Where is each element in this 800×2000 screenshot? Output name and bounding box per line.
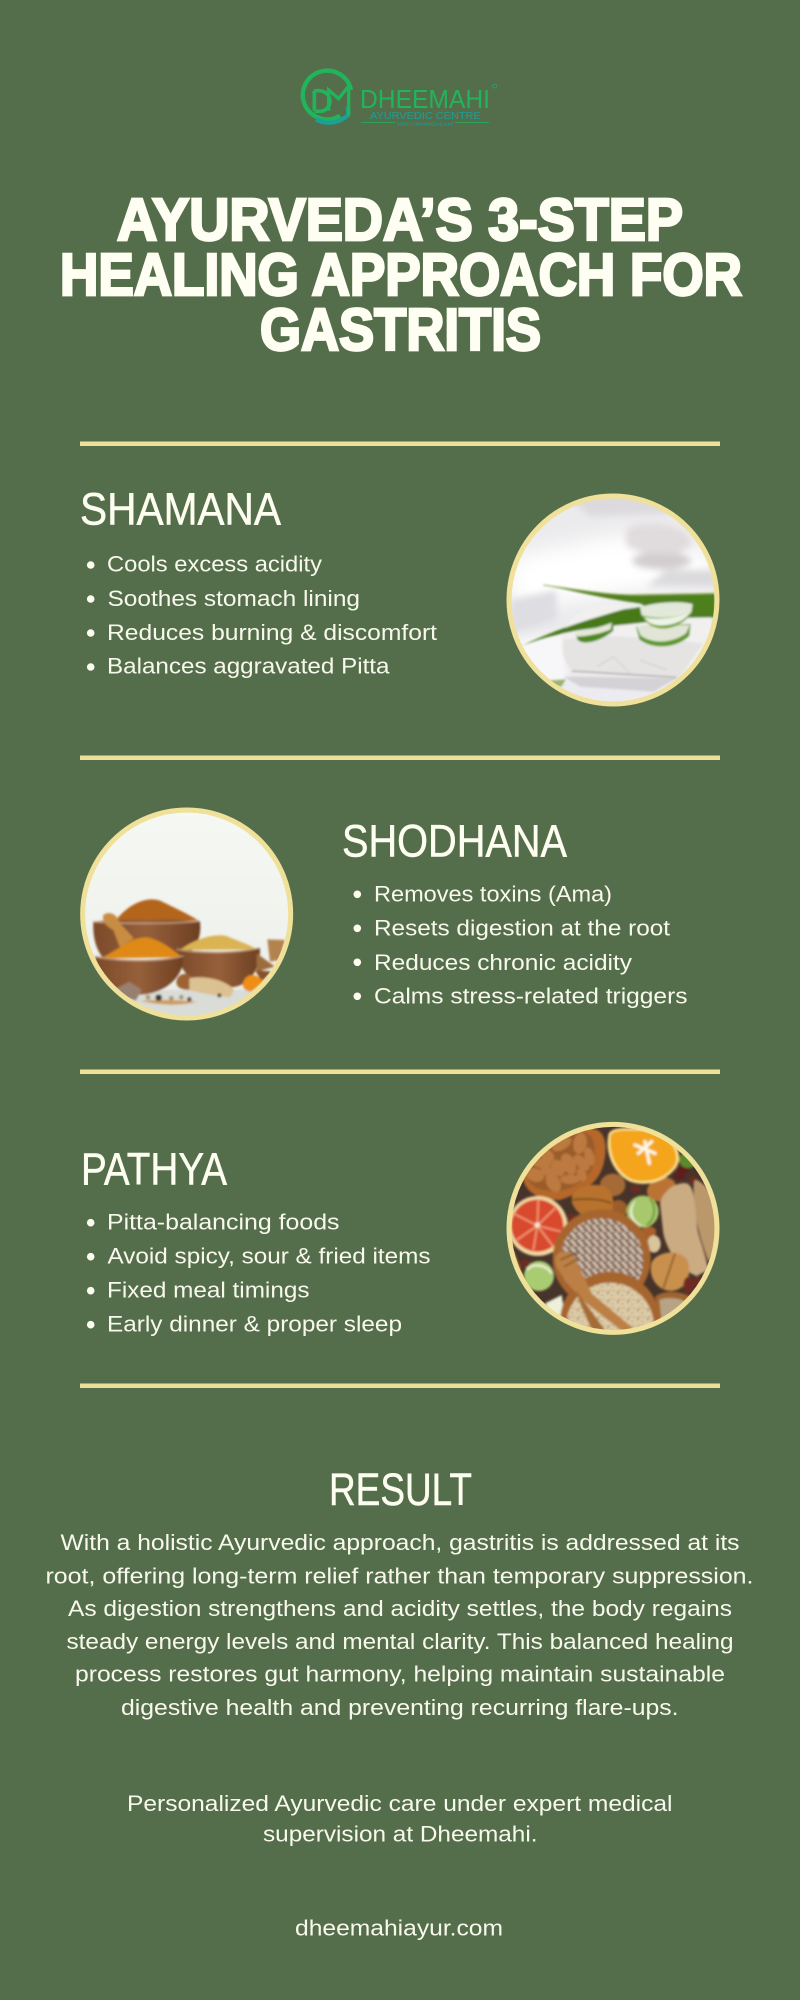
title: GASTRITIS [260, 297, 541, 363]
callout: personalized care [127, 1791, 672, 1847]
list: Shamana benefits: Reduces burning & discomfort [107, 620, 438, 645]
logo: Dheemahi Ayurvedic Centre: AYURVEDIC CENTRE [370, 110, 481, 122]
paragraph: Result text: As digestion strengthens and acidity settles, the body regains [68, 1596, 732, 1621]
image: spice bowls [77, 803, 297, 1023]
title [60, 187, 742, 363]
divider rules [80, 442, 720, 1388]
heading: Shodhana: SHODHANA [342, 816, 567, 867]
list: Pathya guidelines [87, 1209, 430, 1337]
list: Shodhana benefits: Removes toxins (Ama) [374, 882, 612, 907]
list: Pathya guidelines: Avoid spicy, sour & fried items [108, 1243, 430, 1268]
title: AYURVEDA’S 3-STEP [117, 187, 683, 253]
logo: Dheemahi Ayurvedic Centre [303, 71, 496, 126]
panel: Shodhana [77, 803, 688, 1023]
list: Pathya guidelines: Early dinner & proper sleep [107, 1312, 402, 1337]
paragraph: Result text: digestive health and preventing recurring flare-ups. [121, 1695, 678, 1720]
list: Shamana benefits [87, 552, 438, 678]
paragraph: Result text [46, 1530, 754, 1720]
callout: personalized care: supervision at Dheemahi. [263, 1822, 538, 1847]
title: HEALING APPROACH FOR [60, 242, 742, 308]
paragraph: Result text: With a holistic Ayurvedic approach, gastritis is addressed at its [60, 1530, 740, 1555]
image: healthy foods [506, 1122, 720, 1335]
paragraph: Result text: process restores gut harmony, helping maintain sustainable [75, 1662, 725, 1687]
heading: Pathya: PATHYA [81, 1143, 227, 1194]
list: Pathya guidelines: Fixed meal timings [107, 1277, 310, 1302]
paragraph: Result text: steady energy levels and mental clarity. This balanced healing [66, 1629, 734, 1654]
list: Shamana benefits: Balances aggravated Pitta [107, 654, 390, 678]
section: Result [46, 1464, 754, 1720]
heading: Result: RESULT [329, 1464, 472, 1515]
list: Shodhana benefits: Reduces chronic acidity [374, 950, 633, 975]
image: aloe vera on marble [503, 490, 723, 710]
logo: Dheemahi Ayurvedic Centre: DHEEMAHI [360, 84, 490, 114]
panel: Shamana [80, 483, 723, 710]
panel: Pathya [84, 1122, 720, 1336]
callout: personalized care: Personalized Ayurvedic care under expert medical [127, 1791, 672, 1816]
list: Shamana benefits: Cools excess acidity [107, 552, 323, 577]
paragraph: Result text: root, offering long-term relief rather than temporary suppression. [46, 1563, 754, 1588]
logo: Dheemahi Ayurvedic Centre: NEELIMANGALAM [397, 122, 453, 126]
heading: Shamana: SHAMANA [80, 483, 281, 534]
list: Pathya guidelines: Pitta-balancing foods [107, 1209, 340, 1234]
website url: dheemahiayur.com [295, 1916, 503, 1941]
list: Shodhana benefits: Calms stress-related triggers [374, 983, 688, 1008]
list: Shodhana benefits: Resets digestion at the root [374, 916, 671, 941]
list: Shodhana benefits [354, 882, 688, 1008]
list: Shamana benefits: Soothes stomach lining [108, 586, 360, 611]
